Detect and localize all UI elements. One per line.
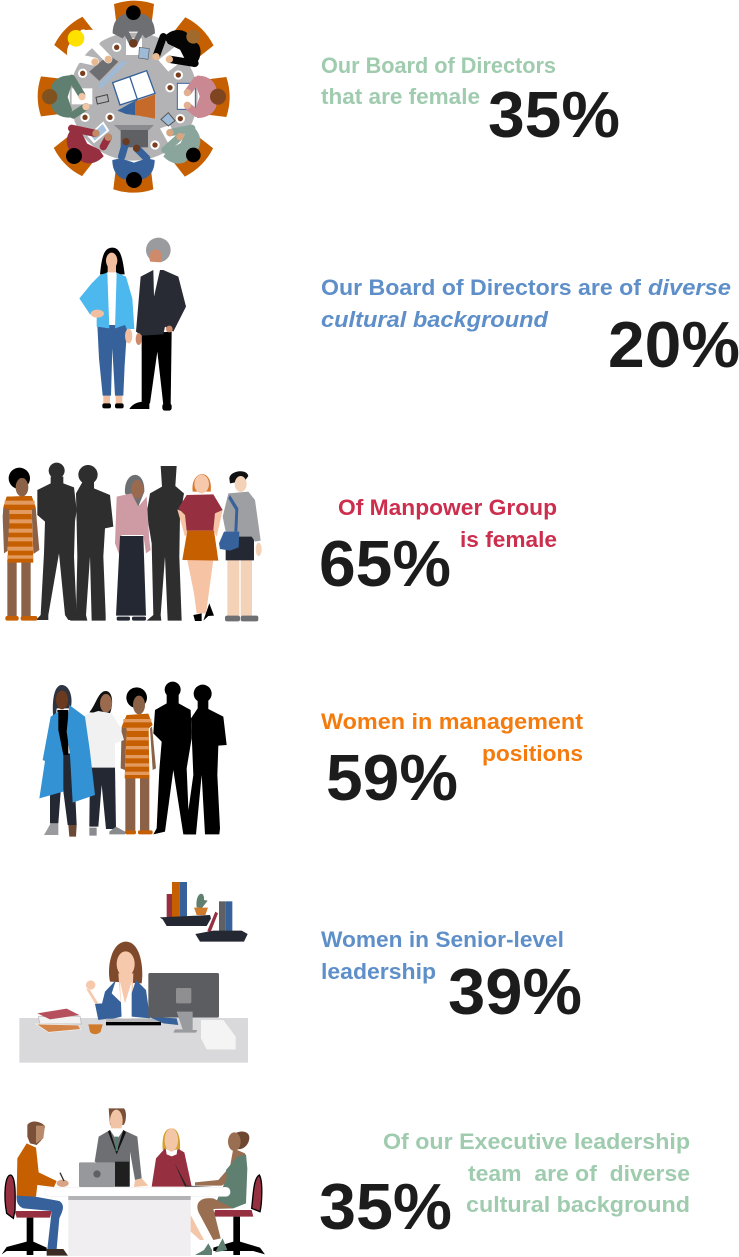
text: board female label and value [321, 53, 620, 151]
text: board diversity label and value: diverse [648, 275, 731, 300]
text: executive label and value: team are of diverse [468, 1161, 690, 1186]
text: executive label and value: cultural background [466, 1192, 690, 1217]
text: board female label and value: Our Board of Directors [321, 53, 556, 78]
illustration: group of seven people [3, 463, 262, 621]
text: management label and value: 59% [326, 741, 458, 814]
text: manpower label and value: Of Manpower Group [338, 495, 557, 520]
text: board diversity label and value: Our Board of Directors are of [321, 275, 642, 300]
text: senior leadership label and value: leadership [321, 959, 436, 984]
text: executive label and value: 35% [319, 1170, 452, 1243]
panel: board of directors female [38, 1, 620, 193]
panel: executive leadership team [2, 1108, 690, 1256]
text: executive label and value [319, 1129, 690, 1243]
text: management label and value: Women in management [321, 709, 584, 734]
illustration: woman and man in turban standing [79, 238, 186, 411]
text: board diversity label and value: 20% [608, 308, 739, 381]
text: manpower label and value: is female [460, 527, 557, 552]
text: board diversity label and value [321, 275, 739, 381]
text: management label and value: positions [482, 741, 583, 766]
text: management label and value [321, 709, 584, 814]
text: senior leadership label and value: 39% [448, 955, 582, 1028]
illustration: group of five people [39, 682, 227, 837]
illustration: round table meeting from above [38, 1, 230, 193]
illustration: woman at desk with monitor and shelves [19, 882, 248, 1063]
text: manpower label and value [319, 495, 557, 600]
text: senior leadership label and value: Women in Senior-level [321, 927, 564, 952]
text: senior leadership label and value [321, 927, 582, 1028]
illustration: team meeting around a table [2, 1108, 265, 1256]
text: board female label and value: 35% [488, 78, 620, 151]
text: board female label and value: that are female [321, 84, 480, 109]
panel: board of directors cultural diversity [79, 238, 739, 411]
panel: women in senior leadership [19, 882, 582, 1063]
panel: women in management [39, 682, 584, 837]
text: executive label and value: Of our Executive leadership [383, 1129, 690, 1154]
panel: manpower group female [3, 463, 557, 621]
text: board diversity label and value: cultural background [321, 307, 549, 332]
text: manpower label and value: 65% [319, 527, 451, 600]
